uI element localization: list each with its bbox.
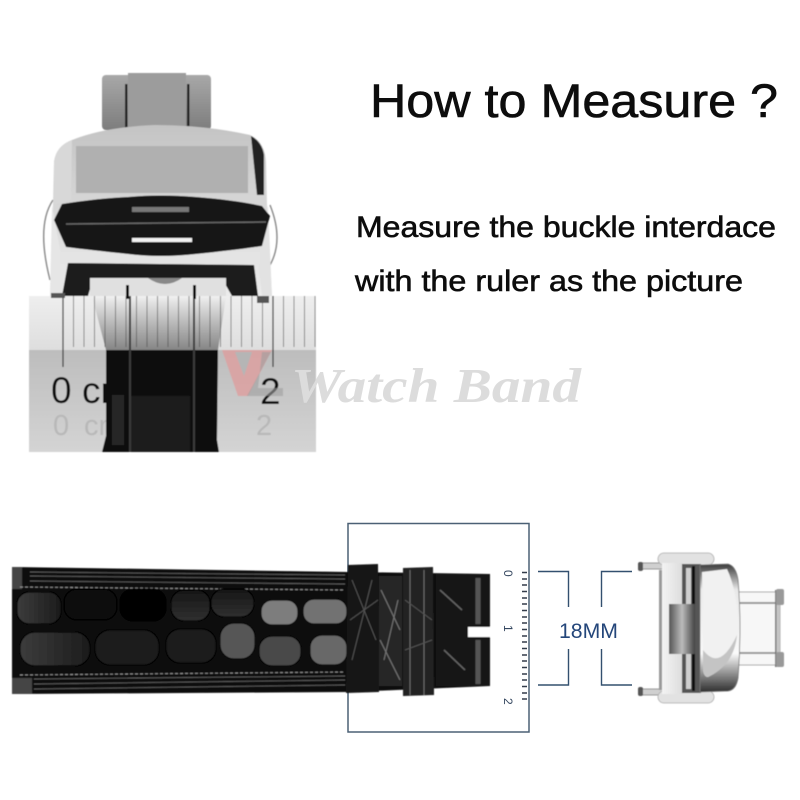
watermark logo V [222,350,283,396]
leather strap [12,564,492,696]
wire loops [44,200,277,280]
instruction text: Measure the buckle interdace [356,211,776,244]
ruler numerals: 0 [51,370,72,411]
strap keeper loop 2 [403,567,434,696]
strap left hinge [12,567,32,694]
measuring frame [348,524,529,732]
scale numerals: 1 [501,625,515,632]
ruler reflection numerals: cm [84,410,123,442]
strap under ruler [92,285,226,452]
clasp opening [62,263,258,296]
ruler numerals [51,370,281,412]
tick marks [522,572,527,699]
dark clasp band [54,196,270,256]
ruler reflection numerals [53,410,272,442]
ruler reflection numerals: 0 [53,410,69,442]
scale numerals [501,570,515,705]
buckle side view [638,553,784,703]
strap tip texture [379,574,492,686]
instruction text: with the ruler as the picture [354,265,743,298]
lower row crocodile scales [20,623,347,666]
polished cover plate [700,564,740,692]
ruler numerals: cm [82,370,131,411]
strap stitching [20,572,345,689]
instruction text [354,211,776,298]
top row crocodile scales [17,589,347,625]
ruler numerals: 2 [260,371,281,412]
strap base [12,567,490,694]
buckle tail [737,589,784,667]
buckle side body [658,553,714,703]
watermark: Watch Band: Watch Band [291,358,583,413]
buckle corner pins [51,293,269,303]
title: How to Measure ? [370,74,778,127]
scale numerals: 0 [501,570,515,577]
scale with millimetre ticks [501,570,527,705]
strap keeper loop 1 [346,564,379,693]
ruler tick marks [74,296,315,347]
ruler reflection numerals: 2 [256,410,272,442]
spring bar pins [638,562,664,696]
dimension label: 18MM [559,620,618,643]
buckle body [50,125,272,296]
ruler long ticks [63,296,273,367]
photo: buckle measured with a centimetre ruler [29,73,316,452]
ruler [29,296,316,452]
18MM dimension brackets [538,572,632,685]
centre hinge [669,604,695,654]
buckle hinge top [102,73,211,130]
scale numerals: 2 [501,698,515,705]
